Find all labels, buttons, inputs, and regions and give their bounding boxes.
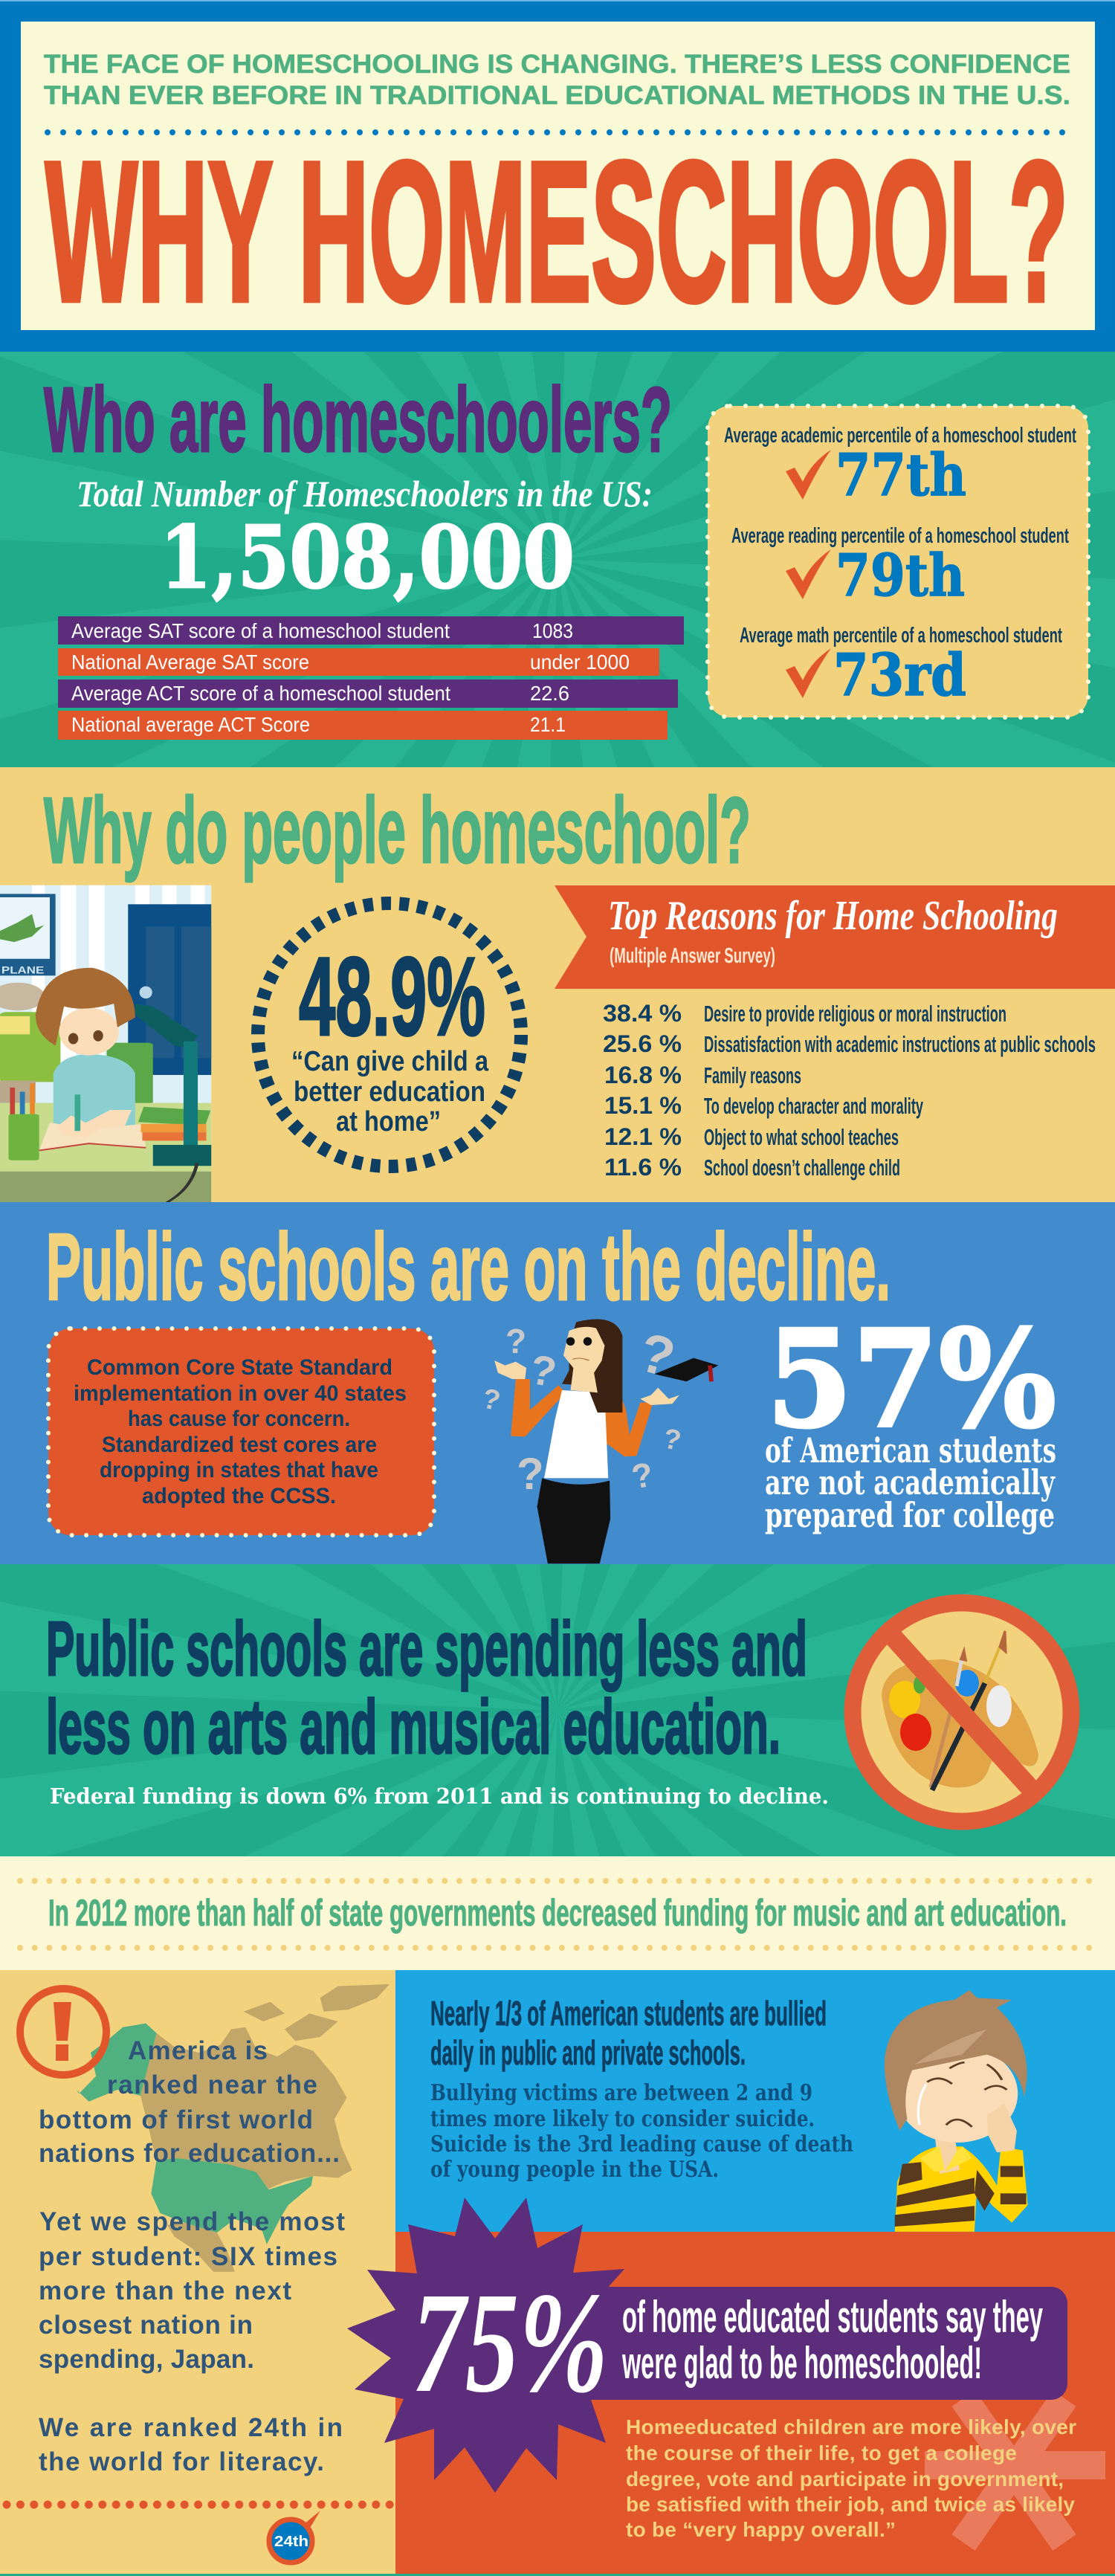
icon: check marks xyxy=(786,450,831,698)
text: ranking: America is xyxy=(128,2036,268,2065)
illustration: crying boy xyxy=(885,1990,1028,2232)
text: federal funding: Federal funding is down 6% from 2011 and is continuing to decline. xyxy=(50,1783,829,1809)
illustration: boy studying at desk: PLANE xyxy=(1,964,44,975)
heading xyxy=(430,1994,827,2072)
text block: home educated: the course of their life, to get a college xyxy=(626,2441,1017,2464)
illustration: confused woman: ? xyxy=(517,1449,544,1499)
panel: bullying xyxy=(395,1970,1115,2232)
panel: why do people homeschool xyxy=(0,767,1115,1202)
list: reasons: Family reasons xyxy=(704,1062,801,1088)
heading xyxy=(46,1606,807,1769)
badge: 48.9 percent: at home” xyxy=(336,1106,441,1137)
callout: common core: adopted the CCSS. xyxy=(142,1484,336,1508)
list: reasons: To develop character and morality xyxy=(704,1093,923,1119)
list: reasons: 15.1 % xyxy=(604,1092,682,1119)
panel: state funding banner xyxy=(0,1856,1115,1970)
icon: no art palette xyxy=(853,1603,1071,1821)
illustration: confused woman: ? xyxy=(527,1346,560,1396)
percentile card: 77th xyxy=(836,442,966,509)
text: ranking: bottom of first world xyxy=(39,2105,313,2134)
list: reasons: 38.4 % xyxy=(603,1000,682,1027)
illustration: confused woman: ? xyxy=(629,1455,656,1497)
text: ranking: more than the next xyxy=(39,2276,291,2305)
text: ranking: ranked near the xyxy=(107,2070,317,2099)
callout: common core: has cause for concern. xyxy=(128,1407,350,1431)
heading: daily in public and private schools. xyxy=(430,2033,746,2072)
badge: 48.9 percent xyxy=(258,903,521,1166)
list: reasons: School doesn’t challenge child xyxy=(704,1155,900,1181)
text block: Bullying victims are between 2 and 9 xyxy=(430,2080,812,2106)
background: green rays top section xyxy=(0,352,1115,767)
text block: home educated: be satisfied with their job, and twice as likely xyxy=(626,2493,1075,2516)
percentile card: 79th xyxy=(836,542,965,610)
score bars xyxy=(58,616,684,740)
panel: public schools decline xyxy=(0,1202,1115,1564)
score bars: National average ACT Score xyxy=(71,713,310,736)
ribbon: top reasons: (Multiple Answer Survey) xyxy=(610,944,775,968)
map: north america xyxy=(77,1984,390,2272)
text: ranking: per student: SIX times xyxy=(39,2242,337,2271)
list: reasons: 16.8 % xyxy=(604,1062,682,1088)
illustration: confused woman xyxy=(479,1319,719,1563)
text block xyxy=(430,2080,853,2183)
text block: Suicide is the 3rd leading cause of death xyxy=(430,2131,853,2157)
decorative asterisk xyxy=(925,2398,1105,2543)
intro text: THAN EVER BEFORE IN TRADITIONAL EDUCATIONAL METHODS IN THE U.S. xyxy=(44,81,1070,110)
score bars: 1083 xyxy=(532,619,573,642)
panel: first world ranking xyxy=(0,1970,395,2574)
score bars: 21.1 xyxy=(530,713,566,736)
illustration: confused woman: ? xyxy=(633,1320,682,1389)
text: ranking xyxy=(39,2036,345,2476)
badge: 48.9 percent: “Can give child a xyxy=(291,1046,489,1077)
score bars: 22.6 xyxy=(530,682,569,705)
callout: common core: dropping in states that have xyxy=(100,1458,378,1482)
illustration: confused woman: ? xyxy=(661,1423,683,1457)
list: reasons: Object to what school teaches xyxy=(704,1124,899,1150)
callout: common core: Standardized test cores are xyxy=(102,1433,377,1457)
text: ranking: Yet we spend the most xyxy=(39,2207,345,2236)
illustration: confused woman: ? xyxy=(505,1322,526,1360)
score bars: under 1000 xyxy=(530,651,630,674)
text: ranking: the world for literacy. xyxy=(39,2447,324,2476)
list: reasons: 12.1 % xyxy=(604,1123,682,1150)
text block: home educated: to be “very happy overall.” xyxy=(626,2518,896,2541)
starburst with 75 percent: 75% xyxy=(412,2262,608,2422)
text block: home educated: degree, vote and participate in government, xyxy=(626,2467,1064,2491)
text: ranking: spending, Japan. xyxy=(39,2345,254,2374)
total label: Total Number of Homeschoolers in the US: xyxy=(77,473,653,514)
callout: 24th: 24th xyxy=(274,2534,308,2550)
stat: 57 percent: 57% xyxy=(766,1301,1056,1458)
percentile card: 73rd xyxy=(833,642,966,709)
score bars: Average SAT score of a homeschool student xyxy=(71,619,450,642)
callout: common core xyxy=(48,1329,434,1535)
callout: 24th xyxy=(269,2511,320,2563)
text block: of young people in the USA. xyxy=(430,2157,719,2183)
intro text xyxy=(44,50,1070,110)
stat: 57 percent xyxy=(765,1301,1056,1535)
panel: arts funding xyxy=(46,1603,1071,1821)
callout: common core: implementation in over 40 states xyxy=(74,1381,407,1406)
callout: common core: Common Core State Standard xyxy=(87,1355,392,1380)
text: ranking: We are ranked 24th in xyxy=(39,2413,343,2442)
ribbon: top reasons xyxy=(555,885,1115,989)
text block: times more likely to consider suicide. xyxy=(430,2106,815,2132)
text: ranking: nations for education... xyxy=(39,2139,340,2168)
total number: 1,508,000 xyxy=(160,508,575,608)
badge: 48.9 percent: better education xyxy=(294,1076,485,1108)
score bars: Average ACT score of a homeschool student xyxy=(71,682,450,705)
text block: home educated: Homeeducated children are more likely, over xyxy=(626,2415,1076,2438)
illustration: boy studying at desk xyxy=(0,885,211,1202)
illustration: confused woman: ? xyxy=(479,1383,503,1417)
list: reasons xyxy=(603,1000,1096,1181)
panel: who are homeschoolers xyxy=(44,369,1088,740)
score bars: National Average SAT score xyxy=(71,651,309,674)
icon: exclamation xyxy=(20,1989,106,2075)
text block: home educated xyxy=(626,2415,1076,2541)
footer strip xyxy=(0,2574,1115,2576)
heading: Nearly 1/3 of American students are bullied xyxy=(430,1994,827,2033)
badge: 48.9 percent: 48.9% xyxy=(299,934,485,1059)
background: green rays arts section xyxy=(0,1564,1115,1856)
panel: 75 percent glad xyxy=(347,2198,1115,2574)
banner: statement xyxy=(520,2287,1067,2400)
list: reasons: 11.6 % xyxy=(604,1154,682,1181)
list: reasons: 25.6 % xyxy=(603,1030,682,1057)
intro text: THE FACE OF HOMESCHOOLING IS CHANGING. THERE’S LESS CONFIDENCE xyxy=(44,50,1070,79)
starburst with 75 percent xyxy=(347,2198,624,2493)
text: ranking: closest nation in xyxy=(39,2311,253,2340)
panel: header xyxy=(0,0,1115,352)
percentile card xyxy=(708,406,1088,717)
